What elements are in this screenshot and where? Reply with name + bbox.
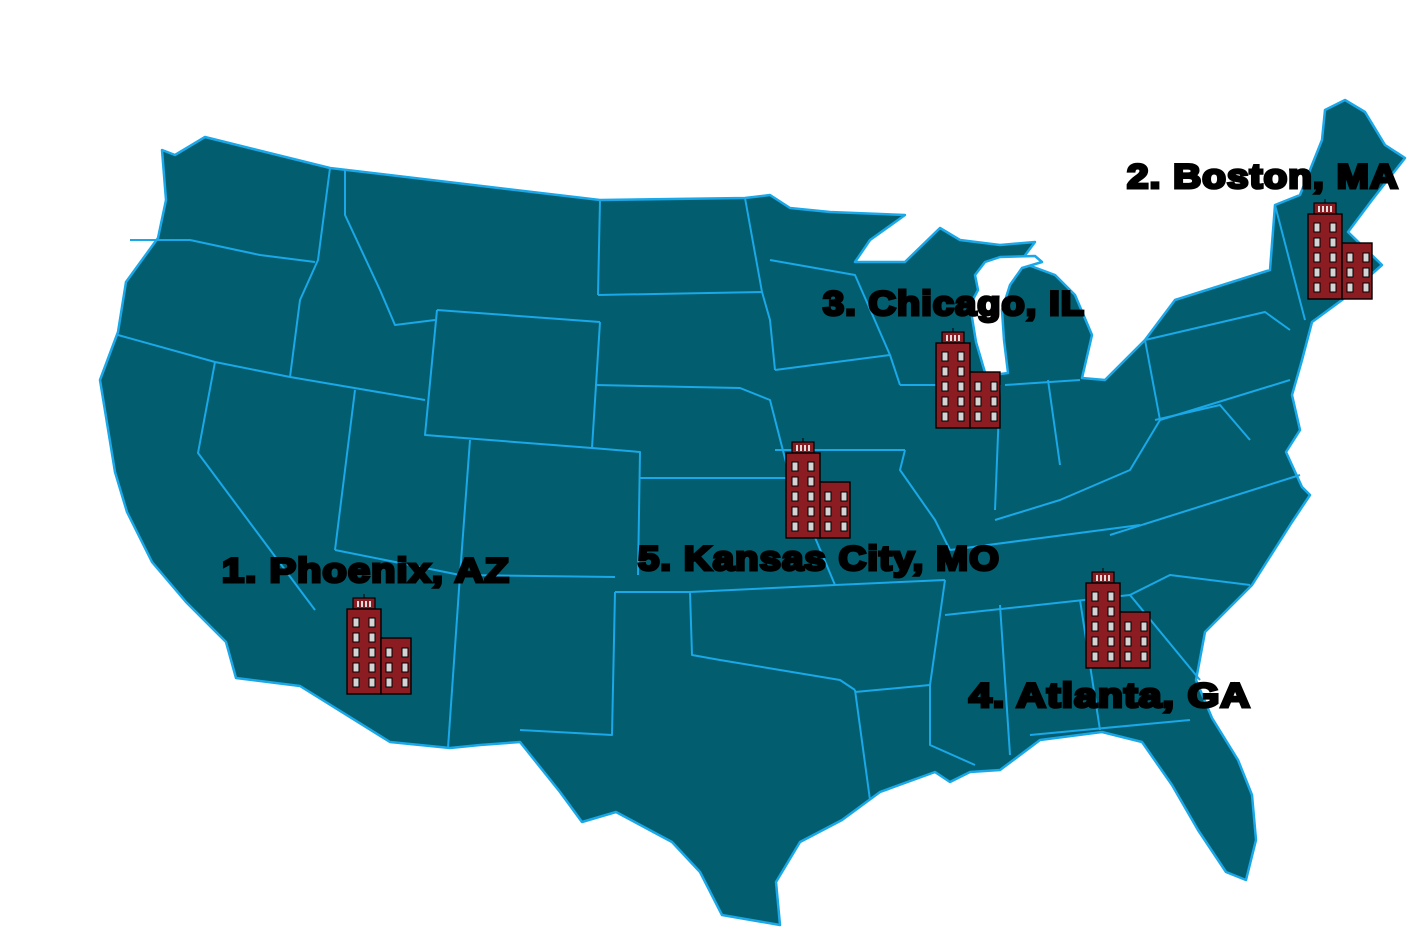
lake: Lake Michigan: [970, 256, 1042, 376]
label: Atlanta: 4. Atlanta, GA: [969, 677, 1251, 715]
marker: Boston building: [1308, 199, 1372, 299]
label: Kansas City: 5. Kansas City, MO: [638, 540, 1000, 578]
marker: Phoenix building: [347, 594, 411, 694]
marker: Atlanta building: [1086, 568, 1150, 668]
marker: Kansas City building: [786, 438, 850, 538]
label: Phoenix: 1. Phoenix, AZ: [222, 552, 510, 590]
label: Chicago: 3. Chicago, IL: [823, 285, 1085, 323]
marker: Chicago building: [936, 328, 1000, 428]
label: Boston: 2. Boston, MA: [1127, 158, 1399, 196]
